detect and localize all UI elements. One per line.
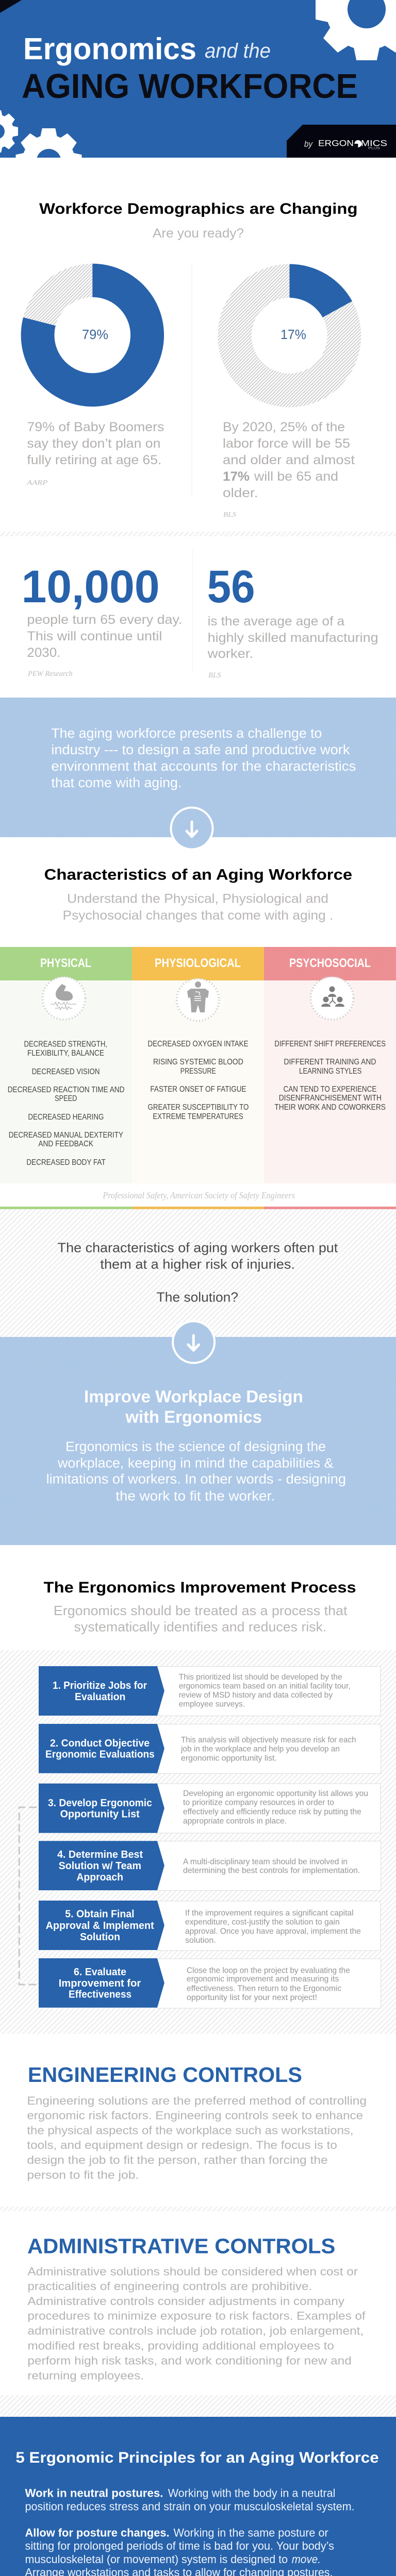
panel: physical column [0, 947, 132, 1183]
panel: engineering controls: person to fit the job. [27, 2168, 139, 2181]
step 4: Approach [76, 1871, 123, 1883]
text: labor force stat: 17% [223, 469, 250, 484]
list: physiological changes: GREATER SUSCEPTIBILITY TO [147, 1103, 249, 1112]
text: baby boomers stat [26, 420, 164, 487]
stat: 10,000: people turn 65 every day. [27, 613, 182, 627]
step 5: approval. Once you have approval, implement the [185, 1927, 361, 1936]
list: psychosocial changes: DISENFRANCHISEMENT WITH [279, 1094, 382, 1103]
panel: administrative controls: Administrative solutions should be considered when cost or [27, 2265, 358, 2278]
step 4: Solution w/ Team [59, 1860, 141, 1872]
step 5: Approval & Implement [46, 1920, 154, 1931]
panel: administrative controls: perform high risk tasks, and work conditioning for new and [27, 2354, 352, 2367]
step 5: 5. Obtain Final [65, 1908, 134, 1920]
panel: aging workforce challenge: The aging workforce presents a challenge to [51, 726, 322, 741]
panel: administrative controls: practicalities of engineering controls are prohibitive. [27, 2280, 312, 2293]
title: Ergonomics [23, 32, 196, 66]
step 3: appropriate controls in place. [183, 1817, 287, 1825]
panel: engineering controls: the physical aspects of the workplace such as workstations, [27, 2124, 354, 2137]
step 6 [39, 1958, 381, 2008]
panel: administrative controls: ADMINISTRATIVE CONTROLS [27, 2234, 335, 2258]
panel: aging workforce challenge: environment that accounts for the characteristics [51, 759, 356, 774]
donut chart: 17 percent: 17% [280, 327, 306, 342]
heading: characteristics: Understand the Physical, Physiological and [67, 892, 328, 906]
list: psychosocial changes: LEARNING STYLES [299, 1067, 361, 1076]
text: ergonomics definition: Ergonomics is the science of designing the [65, 1440, 326, 1454]
heading: improvement process: Ergonomics should be treated as a process that [54, 1603, 348, 1618]
panel: administrative controls: Administrative controls consider adjustments in company [27, 2295, 344, 2308]
principle: neutral postures [25, 2487, 355, 2513]
step 1: employee surveys. [179, 1700, 245, 1709]
step 2 [39, 1724, 381, 1773]
black corner [0, 0, 22, 13]
text: ergonomics definition [46, 1440, 346, 1504]
step 6: 6. Evaluate [74, 1966, 126, 1978]
step 5: solution. [185, 1936, 216, 1945]
panel: engineering controls [27, 2063, 367, 2181]
arrow: down to ergonomics [173, 1321, 214, 1363]
text: ergonomics definition: workplace, keeping in mind the capabilities & [57, 1456, 333, 1470]
list: physiological changes: RISING SYSTEMIC BLOOD [153, 1058, 243, 1066]
panel: psychosocial column [264, 947, 396, 1183]
step 6: Close the loop on the project by evaluating the [187, 1966, 350, 1975]
list: physiological changes: PRESSURE [180, 1067, 216, 1076]
donut chart: 79 percent [21, 264, 164, 406]
text: labor force stat: will be 65 and [254, 469, 338, 484]
panel: engineering controls: design the job to fit the person, rather than forcing the [27, 2154, 328, 2166]
list: physical changes: FLEXIBILITY, BALANCE [27, 1049, 104, 1058]
byline badge: MICS [361, 138, 387, 148]
list: physical changes: DECREASED REACTION TIME AND [8, 1086, 125, 1094]
list: physiological changes: DECREASED OXYGEN INTAKE [147, 1040, 249, 1048]
step 1 [39, 1666, 381, 1716]
panel: risk of injuries: The characteristics of aging workers often put [58, 1240, 338, 1256]
list: physical changes: DECREASED MANUAL DEXTERITY [9, 1131, 123, 1140]
panel: engineering controls: tools, and equipment design or redesign. The focus is to [27, 2139, 337, 2151]
step 4 [39, 1841, 381, 1891]
stat: 10,000: PEW Research [27, 670, 73, 678]
panel: engineering controls: ENGINEERING CONTROLS [28, 2063, 302, 2087]
list: psychosocial changes: DIFFERENT TRAINING AND [284, 1058, 376, 1066]
arrow: down to characteristics [171, 808, 212, 849]
stat: 10,000: 10,000 [22, 561, 160, 612]
panel: physical column: PHYSICAL [40, 956, 91, 970]
list: psychosocial changes [274, 1040, 386, 1112]
principle: posture changes: move. [292, 2553, 321, 2566]
stat: 56: BLS [208, 671, 221, 680]
principle: neutral postures: position reduces stress and strain on your musculoskeletal system. [25, 2500, 355, 2513]
icon: flexed arm with pulse [42, 977, 86, 1020]
list: physical changes: AND FEEDBACK [38, 1140, 94, 1148]
icon: torso [177, 979, 219, 1021]
principle: posture changes [25, 2527, 334, 2576]
principle: neutral postures: Work in neutral postures. [25, 2487, 163, 2500]
panel: risk of injuries [0, 1209, 396, 1337]
heading: improve workplace design: with Ergonomics [125, 1408, 262, 1427]
panel: engineering controls: Engineering solutions are the preferred method of controlling [27, 2094, 367, 2107]
panel: engineering controls: ergonomic risk factors. Engineering controls seek to enhance [27, 2109, 363, 2122]
step 3: effectively and efficiently reduce risk by putting the [183, 1807, 361, 1816]
panel: physiological column: PHYSIOLOGICAL [155, 956, 241, 970]
step 3: Opportunity List [60, 1808, 140, 1820]
heading: characteristics [44, 867, 352, 923]
step 2: job in the workplace and help you develop an [180, 1744, 340, 1753]
principle: posture changes: sitting for prolonged periods of time is bad for you. Your body’s [25, 2539, 334, 2552]
title: AGING WORKFORCE [22, 67, 358, 106]
heading: improve workplace design [84, 1387, 303, 1427]
text: labor force stat: labor force will be 55 [223, 436, 350, 451]
text: baby boomers stat: 79% of Baby Boomers [27, 420, 164, 434]
step 3: Developing an ergonomic opportunity list allows you [183, 1789, 368, 1798]
list: physical changes: DECREASED HEARING [28, 1113, 104, 1122]
panel: administrative controls: modified rest breaks, providing additional employees to [27, 2340, 334, 2352]
byline badge: by [304, 139, 313, 149]
stat: 10,000: 2030. [27, 646, 60, 660]
panel: header banner [0, 0, 396, 158]
list: physiological changes [147, 1040, 249, 1121]
step 5: If the improvement requires a significant capital [185, 1909, 354, 1918]
panel: administrative controls [27, 2234, 366, 2382]
arrow: dashed feedback loop [19, 1807, 37, 1985]
step 5 [39, 1901, 381, 1951]
text: baby boomers stat: AARP [26, 479, 48, 487]
text: labor force stat [223, 420, 355, 519]
stat: 56: 56 [207, 561, 255, 612]
step 5: expenditure, cost-justify the solution to gain [185, 1918, 340, 1926]
panel: administrative controls: returning employees. [27, 2369, 144, 2382]
stat: 10,000 [22, 561, 182, 678]
donut chart: 79 percent: 79% [82, 327, 108, 342]
icon: three people [310, 977, 354, 1020]
byline badge: PLUS [368, 147, 380, 150]
heading: improvement process [44, 1579, 356, 1635]
principle: neutral postures: Working with the body in a neutral [168, 2487, 335, 2500]
list: physiological changes: FASTER ONSET OF FATIGUE [150, 1085, 246, 1094]
text: ergonomics definition: the work to fit the worker. [116, 1489, 275, 1504]
donut chart: 17 percent [218, 264, 361, 407]
stat: 56: worker. [207, 647, 253, 661]
heading: workforce demographics: Workforce Demographics are Changing [39, 200, 358, 217]
panel: psychosocial column: PSYCHOSOCIAL [289, 956, 371, 970]
step 6: effectiveness. Then return to the Ergonomic [187, 1984, 341, 1993]
title [23, 37, 357, 98]
step 6: Improvement for [59, 1977, 141, 1989]
step 1: Evaluation [75, 1691, 125, 1703]
principle: posture changes: Working in the same posture or [173, 2527, 328, 2539]
list: physical changes: DECREASED STRENGTH, [24, 1040, 107, 1049]
step 2: Ergonomic Evaluations [45, 1749, 155, 1760]
step 6: ergonomic improvement and measuring its [187, 1975, 339, 1984]
step 6: Effectiveness [69, 1989, 131, 2001]
heading: improvement process: The Ergonomics Improvement Process [44, 1579, 356, 1596]
icon: bottom left gears [0, 110, 81, 158]
heading: characteristics: Characteristics of an Aging Workforce [44, 867, 352, 883]
stat: 56: highly skilled manufacturing [208, 631, 378, 645]
list: physical changes: DECREASED BODY FAT [26, 1158, 106, 1167]
step 3: to prioritize company resources in order to [183, 1798, 334, 1807]
panel: process steps [0, 1650, 396, 2034]
stat: 56: is the average age of a [208, 614, 344, 629]
heading: improvement process: systematically identifies and reduces risk. [74, 1619, 326, 1635]
principle: posture changes: musculoskeletal (or movement) system is designed to [25, 2553, 288, 2566]
step 1: This prioritized list should be developed by the [179, 1673, 342, 1682]
panel: aging workforce challenge [0, 698, 396, 837]
heading: principles: 5 Ergonomic Principles for an Aging Workforce [15, 2449, 379, 2466]
heading: improve workplace design: Improve Workplace Design [84, 1387, 303, 1406]
step 4: 4. Determine Best [57, 1849, 143, 1860]
step 4: A multi-disciplinary team should be involved in [183, 1857, 348, 1866]
list: psychosocial changes: CAN TEND TO EXPERIENCE [284, 1085, 376, 1094]
text: labor force stat: BLS [223, 511, 236, 519]
step 4: determining the best controls for implementation. [183, 1866, 360, 1875]
panel: administrative controls: administrative controls include job rotation, job enlargement, [27, 2325, 364, 2337]
heading: characteristics: Psychosocial changes that come with aging . [63, 908, 333, 923]
stat: 10,000: This will continue until [27, 629, 162, 643]
step 1: review of MSD history and data collected by [179, 1691, 333, 1700]
panel: 5 ergonomic principles [0, 2417, 396, 2576]
step 1: ergonomics team based on an initial facility tour, [179, 1682, 351, 1690]
step 2: ergonomic opportunity list. [181, 1754, 277, 1762]
text: labor force stat: By 2020, 25% of the [223, 420, 345, 434]
step 3: 3. Develop Ergonomic [48, 1797, 152, 1809]
step 2: 2. Conduct Objective [50, 1737, 150, 1749]
panel: administrative controls: procedures to minimize exposure to risk factors. Examples of [27, 2310, 366, 2323]
list: physiological changes: EXTREME TEMPERATURES [153, 1112, 243, 1121]
step 5: Solution [80, 1931, 120, 1943]
byline badge [287, 125, 396, 158]
panel: aging workforce challenge: that come with aging. [51, 776, 182, 790]
list: psychosocial changes: THEIR WORK AND COWORKERS [274, 1103, 386, 1112]
text: ergonomics definition: limitations of workers. In other words - designing [46, 1472, 346, 1487]
text: labor force stat: older. [223, 486, 258, 500]
list: physical changes: DECREASED VISION [32, 1067, 100, 1076]
panel: aging workforce challenge: industry --- to design a safe and productive work [51, 743, 350, 757]
panel: improve workplace design [0, 1337, 396, 1545]
step 1: 1. Prioritize Jobs for [53, 1680, 147, 1691]
source: professional safety: Professional Safety, American Society of Safety Engineers [103, 1190, 295, 1200]
principle: posture changes: Allow for posture changes. [25, 2527, 170, 2539]
stat: 56 [207, 561, 378, 680]
icon: top right gear [316, 0, 396, 60]
byline badge: ERGON [318, 138, 354, 148]
title: and the [205, 40, 271, 62]
step 6: opportunity list for your next project! [187, 1993, 317, 2002]
list: physical changes: SPEED [55, 1094, 77, 1103]
list: physical changes [8, 1040, 125, 1167]
step 2: This analysis will objectively measure risk for each [181, 1736, 356, 1744]
panel: physiological column [132, 947, 264, 1183]
step 3 [39, 1784, 381, 1833]
heading: workforce demographics: Are you ready? [153, 226, 244, 241]
text: labor force stat: and older and almost [223, 453, 355, 467]
text: baby boomers stat: fully retiring at age 65. [27, 453, 161, 467]
panel: risk of injuries: The solution? [157, 1290, 238, 1305]
heading: workforce demographics [39, 200, 358, 241]
panel: risk of injuries: them at a higher risk of injuries. [100, 1257, 295, 1272]
text: baby boomers stat: say they don’t plan on [27, 436, 160, 451]
